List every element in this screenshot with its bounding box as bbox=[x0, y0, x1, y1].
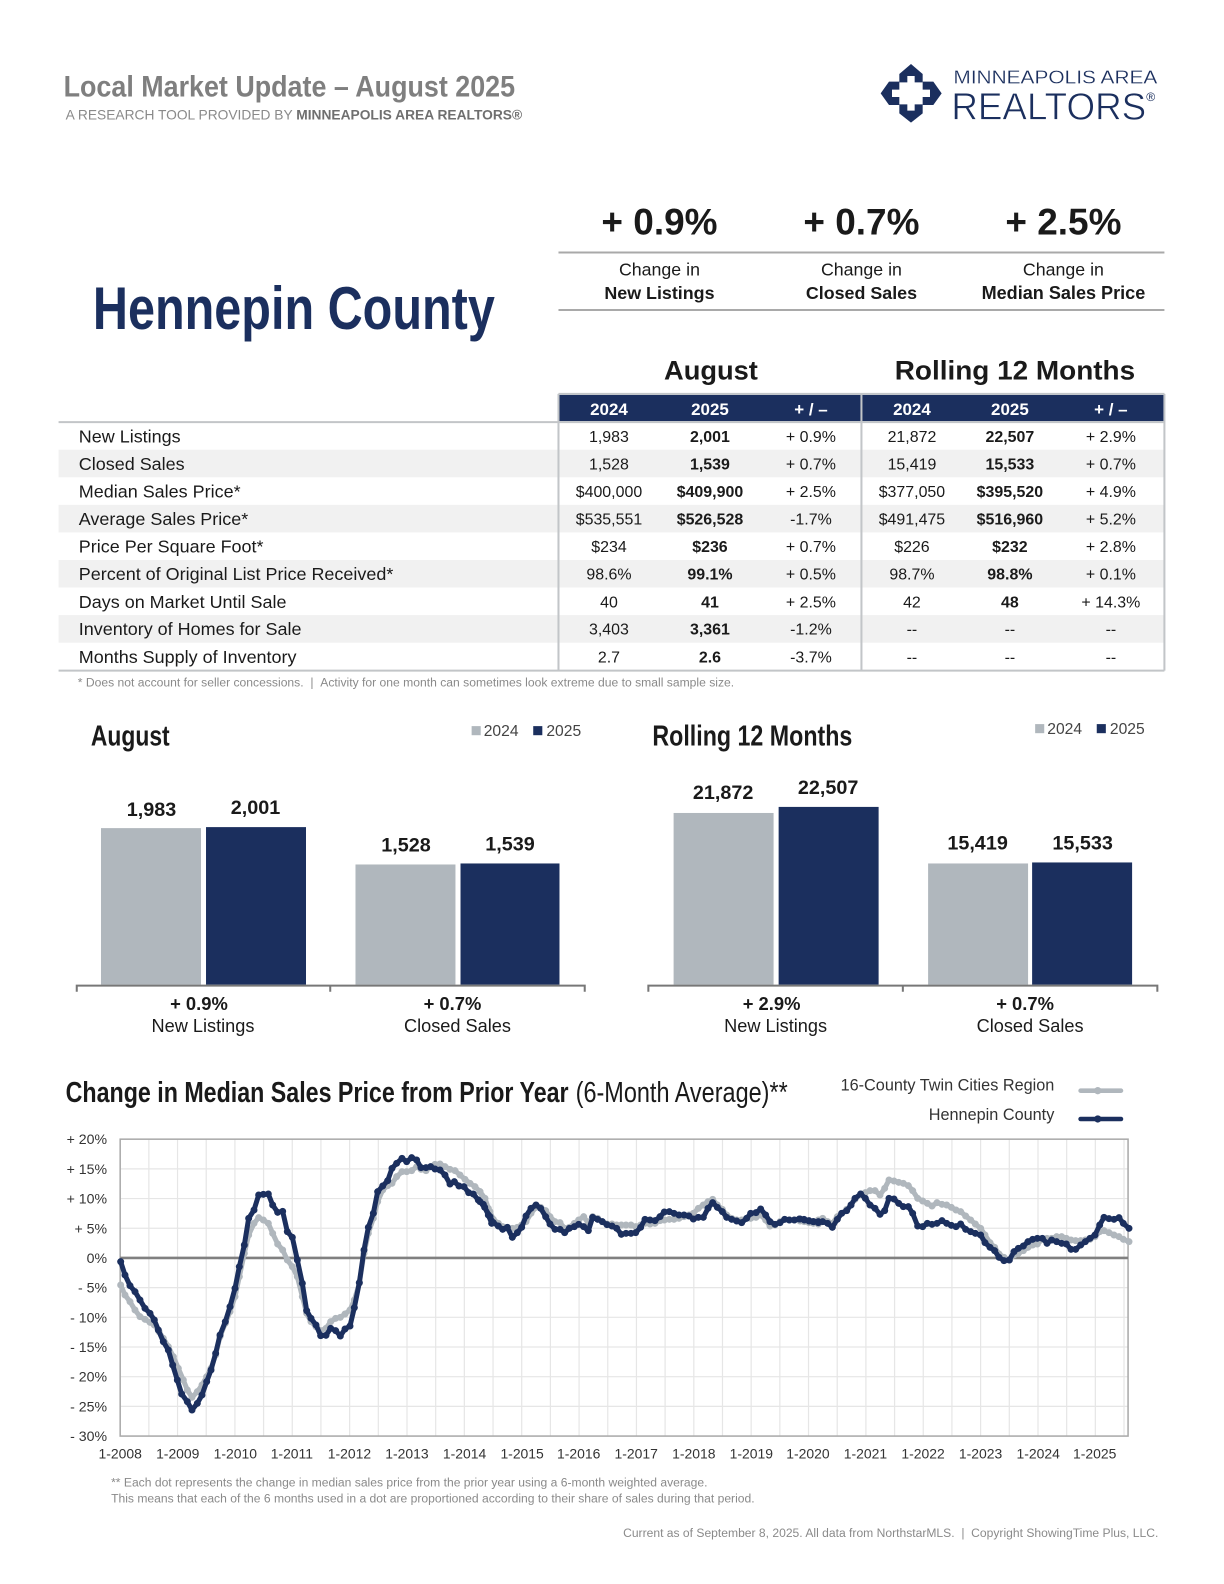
metric: median sales price: Median Sales Price bbox=[982, 283, 1145, 303]
category label: new listings bbox=[152, 993, 254, 1036]
logo wordmark: ® bbox=[1146, 90, 1155, 104]
row: months supply: -3.7% bbox=[790, 649, 832, 666]
legend: 2024 bbox=[484, 723, 519, 740]
metric: median sales price: Change in bbox=[1023, 260, 1104, 280]
row: median sales price: + 4.9% bbox=[1086, 484, 1136, 501]
row: new listings: New Listings bbox=[79, 426, 181, 446]
line chart legend: 16-County Twin Cities Region bbox=[841, 1077, 1054, 1095]
logo wordmark: REALTORS bbox=[951, 86, 1146, 129]
row: months supply: -- bbox=[1106, 649, 1116, 666]
bars: new listings: 22,507 bbox=[798, 777, 858, 799]
header title: A RESEARCH TOOL PROVIDED BY MINNEAPOLIS AREA REALTORS® bbox=[66, 108, 522, 123]
row: price per square foot: $236 bbox=[692, 539, 728, 556]
category label: closed sales: + 0.7% bbox=[424, 993, 481, 1014]
bars: closed sales: 15,419 bbox=[947, 832, 1008, 854]
y axis labels: 0% bbox=[87, 1250, 107, 1266]
table header row: 2025 bbox=[991, 400, 1029, 419]
row: closed sales: + 0.7% bbox=[1086, 457, 1136, 474]
row: percent of original list price: 98.6% bbox=[586, 567, 632, 584]
table header row: + / – bbox=[794, 400, 828, 419]
row: median sales price: $377,050 bbox=[879, 484, 945, 501]
bars: new listings bbox=[101, 797, 306, 985]
row: months supply: Months Supply of Inventory bbox=[79, 647, 297, 667]
row: closed sales: 15,419 bbox=[888, 457, 936, 474]
chart footnote: ** Each dot represents the change in median sales price from the prior year using a 6-month weighted average. bbox=[111, 1476, 707, 1490]
row: average sales price: $526,528 bbox=[677, 512, 743, 529]
row: median sales price: $409,900 bbox=[677, 484, 743, 501]
panel: August bar chart bbox=[77, 719, 585, 1036]
chart gridlines and frame bbox=[120, 1139, 1128, 1436]
row: closed sales: 1,539 bbox=[690, 457, 730, 474]
row: new listings: 22,507 bbox=[986, 429, 1034, 446]
legend bbox=[1035, 721, 1145, 738]
row: inventory: 3,403 bbox=[589, 622, 629, 639]
row: median sales price: $400,000 bbox=[576, 484, 642, 501]
bars: closed sales: 1,528 bbox=[381, 834, 431, 856]
logo wordmark: MINNEAPOLIS AREA bbox=[953, 66, 1158, 87]
table header row bbox=[558, 395, 1164, 421]
icon: realtors logo mark bbox=[881, 64, 942, 123]
bars: new listings: 1,983 bbox=[127, 799, 176, 821]
metric: median sales price: + 2.5% bbox=[1005, 201, 1121, 242]
category label: new listings bbox=[724, 993, 827, 1036]
row: new listings bbox=[79, 426, 1136, 446]
category label: closed sales bbox=[404, 993, 511, 1036]
row: new listings: 1,983 bbox=[589, 429, 629, 446]
row: new listings: + 0.9% bbox=[786, 429, 836, 446]
x axis labels: 1-2014 bbox=[443, 1445, 486, 1461]
row: days on market bbox=[79, 592, 1140, 612]
row: median sales price bbox=[79, 481, 1136, 501]
row: percent of original list price bbox=[79, 564, 1136, 584]
row: price per square foot: + 0.7% bbox=[786, 539, 836, 556]
table header row: + / – bbox=[1094, 400, 1128, 419]
row: new listings: 2,001 bbox=[690, 429, 730, 446]
row: price per square foot: + 2.8% bbox=[1086, 539, 1136, 556]
category label: new listings: New Listings bbox=[152, 1016, 254, 1036]
y axis labels: + 15% bbox=[67, 1161, 107, 1177]
row: new listings: + 2.9% bbox=[1086, 429, 1136, 446]
table footnote: * Does not account for seller concessions. | Activity for one month can sometimes look extreme due to small sample size. bbox=[78, 676, 734, 690]
legend: 2024 bbox=[1047, 721, 1082, 738]
metric: closed sales: Change in bbox=[821, 260, 902, 280]
metric: new listings: + 0.9% bbox=[601, 201, 718, 242]
table heading: August: August bbox=[664, 355, 758, 386]
bars: new listings: 2,001 bbox=[231, 797, 280, 819]
row: median sales price: $395,520 bbox=[977, 484, 1043, 501]
row: median sales price: Median Sales Price* bbox=[79, 481, 241, 501]
row: months supply: -- bbox=[1005, 649, 1015, 666]
legend: 2025 bbox=[1110, 721, 1145, 738]
x axis labels: 1-2020 bbox=[786, 1445, 830, 1461]
table header row: 2024 bbox=[590, 400, 628, 419]
bars: new listings bbox=[674, 777, 879, 985]
logo wordmark bbox=[951, 66, 1158, 129]
row: closed sales: 15,533 bbox=[986, 457, 1034, 474]
y axis labels: + 10% bbox=[67, 1191, 107, 1207]
x axis labels bbox=[98, 1445, 1117, 1461]
row: percent of original list price: 98.8% bbox=[987, 567, 1033, 584]
header title: Local Market Update – August 2025 bbox=[64, 70, 515, 103]
row: months supply: -- bbox=[907, 649, 917, 666]
category label: closed sales: Closed Sales bbox=[404, 1016, 511, 1036]
y axis labels: - 25% bbox=[70, 1398, 107, 1414]
row: days on market: + 14.3% bbox=[1081, 594, 1140, 611]
metric: new listings: New Listings bbox=[604, 283, 715, 303]
heading: Rolling 12 Months bbox=[652, 719, 852, 751]
bars: closed sales bbox=[928, 832, 1132, 985]
row: percent of original list price: + 0.5% bbox=[786, 567, 836, 584]
data table bbox=[59, 394, 1164, 671]
x axis labels: 1-2019 bbox=[730, 1445, 773, 1461]
row: average sales price bbox=[79, 509, 1136, 529]
row: percent of original list price: + 0.1% bbox=[1086, 567, 1136, 584]
row: months supply: 2.7 bbox=[598, 649, 620, 666]
line chart heading: Change in Median Sales Price from Prior Year bbox=[66, 1076, 569, 1108]
row: percent of original list price: 99.1% bbox=[687, 567, 733, 584]
row: closed sales: 1,528 bbox=[589, 457, 629, 474]
table header row: 2024 bbox=[893, 400, 931, 419]
x axis labels: 1-2010 bbox=[214, 1445, 257, 1461]
bars: closed sales: 15,533 bbox=[1052, 832, 1113, 854]
row: days on market: 40 bbox=[600, 594, 618, 611]
y axis labels: - 15% bbox=[70, 1339, 107, 1355]
row: new listings: 21,872 bbox=[888, 429, 936, 446]
x axis labels: 1-2022 bbox=[901, 1445, 945, 1461]
row: percent of original list price: Percent of Original List Price Received* bbox=[79, 564, 393, 584]
category label: new listings: New Listings bbox=[724, 1016, 827, 1036]
header title bbox=[64, 70, 522, 123]
row: inventory: -- bbox=[907, 622, 917, 639]
panel: Rolling 12 Months bar chart bbox=[648, 719, 1157, 1036]
row: price per square foot: $232 bbox=[992, 539, 1028, 556]
chart footnote bbox=[111, 1476, 755, 1506]
metric: median sales price bbox=[982, 201, 1145, 303]
y axis labels: - 30% bbox=[70, 1428, 107, 1444]
heading: August bbox=[91, 719, 170, 751]
row: closed sales bbox=[79, 454, 1136, 474]
row: average sales price: Average Sales Price* bbox=[79, 509, 248, 529]
row: inventory: -- bbox=[1106, 622, 1116, 639]
key metrics panel bbox=[558, 201, 1164, 310]
legend: 2025 bbox=[546, 723, 581, 740]
y axis labels: + 20% bbox=[67, 1131, 107, 1147]
row: months supply: 2.6 bbox=[699, 649, 721, 666]
row: price per square foot: $226 bbox=[894, 539, 930, 556]
row: price per square foot: Price Per Square Foot* bbox=[79, 536, 264, 556]
x axis labels: 1-2012 bbox=[328, 1445, 371, 1461]
row: median sales price: + 2.5% bbox=[786, 484, 836, 501]
x axis labels: 1-2016 bbox=[557, 1445, 601, 1461]
row: months supply bbox=[79, 647, 1116, 667]
category label: new listings: + 2.9% bbox=[743, 993, 800, 1014]
metric: closed sales: + 0.7% bbox=[803, 201, 919, 242]
row: days on market: 42 bbox=[903, 594, 921, 611]
row: inventory: -- bbox=[1005, 622, 1015, 639]
metric: closed sales bbox=[803, 201, 919, 303]
y axis labels bbox=[67, 1131, 107, 1444]
row: average sales price: $516,960 bbox=[977, 512, 1043, 529]
x axis labels: 1-2023 bbox=[959, 1445, 1003, 1461]
category label: closed sales: + 0.7% bbox=[996, 993, 1054, 1014]
row: average sales price: $491,475 bbox=[879, 512, 945, 529]
category label: new listings: + 0.9% bbox=[170, 993, 228, 1014]
chart footnote: This means that each of the 6 months used in a dot are proportioned according to their share of sales during that period. bbox=[111, 1492, 755, 1506]
source line: Current as of September 8, 2025. All data from NorthstarMLS. | Copyright ShowingTime Plus, LLC. bbox=[623, 1526, 1158, 1540]
row: price per square foot: $234 bbox=[591, 539, 627, 556]
category label: closed sales: Closed Sales bbox=[977, 1016, 1084, 1036]
row: closed sales: + 0.7% bbox=[786, 457, 836, 474]
line chart legend: Hennepin County bbox=[929, 1106, 1055, 1124]
x axis labels: 1-2011 bbox=[271, 1445, 313, 1461]
row: average sales price: -1.7% bbox=[790, 512, 832, 529]
x axis labels: 1-2017 bbox=[615, 1445, 658, 1461]
x axis labels: 1-2025 bbox=[1073, 1445, 1117, 1461]
line chart legend bbox=[841, 1077, 1121, 1124]
x axis labels: 1-2013 bbox=[385, 1445, 429, 1461]
bars: new listings: 21,872 bbox=[693, 782, 753, 804]
row: average sales price: $535,551 bbox=[576, 512, 642, 529]
table header row: 2025 bbox=[691, 400, 729, 419]
metric: new listings bbox=[601, 201, 718, 303]
row: days on market: 41 bbox=[701, 594, 719, 611]
row: inventory: -1.2% bbox=[790, 622, 832, 639]
y axis labels: - 20% bbox=[70, 1369, 107, 1385]
line: 16-county region bbox=[121, 1164, 1129, 1397]
county title: Hennepin County bbox=[93, 274, 495, 342]
row: price per square foot bbox=[79, 536, 1136, 556]
line: Hennepin County bbox=[121, 1158, 1129, 1410]
row: closed sales: Closed Sales bbox=[79, 454, 185, 474]
row: inventory: Inventory of Homes for Sale bbox=[79, 619, 301, 639]
category label: closed sales bbox=[977, 993, 1084, 1036]
x axis labels: 1-2015 bbox=[500, 1445, 544, 1461]
legend bbox=[472, 723, 581, 740]
x axis labels: 1-2024 bbox=[1016, 1445, 1060, 1461]
x axis labels: 1-2018 bbox=[672, 1445, 716, 1461]
metric: new listings: Change in bbox=[619, 260, 700, 280]
row: average sales price: + 5.2% bbox=[1086, 512, 1136, 529]
row: days on market: Days on Market Until Sale bbox=[79, 592, 287, 612]
x axis labels: 1-2021 bbox=[844, 1445, 887, 1461]
y axis labels: - 5% bbox=[78, 1280, 107, 1296]
line chart heading: (6-Month Average)** bbox=[576, 1076, 788, 1108]
x axis labels: 1-2008 bbox=[98, 1445, 142, 1461]
x axis labels: 1-2009 bbox=[156, 1445, 200, 1461]
row: percent of original list price: 98.7% bbox=[889, 567, 935, 584]
row: days on market: + 2.5% bbox=[786, 594, 836, 611]
table heading: Rolling 12 Months: Rolling 12 Months bbox=[895, 355, 1135, 386]
row: inventory bbox=[79, 619, 1116, 639]
bars: closed sales: 1,539 bbox=[485, 833, 535, 855]
y axis labels: - 10% bbox=[70, 1309, 107, 1325]
row: days on market: 48 bbox=[1001, 594, 1019, 611]
metric: closed sales: Closed Sales bbox=[806, 283, 917, 303]
row: inventory: 3,361 bbox=[690, 622, 730, 639]
bars: closed sales bbox=[355, 833, 559, 985]
y axis labels: + 5% bbox=[74, 1220, 107, 1236]
